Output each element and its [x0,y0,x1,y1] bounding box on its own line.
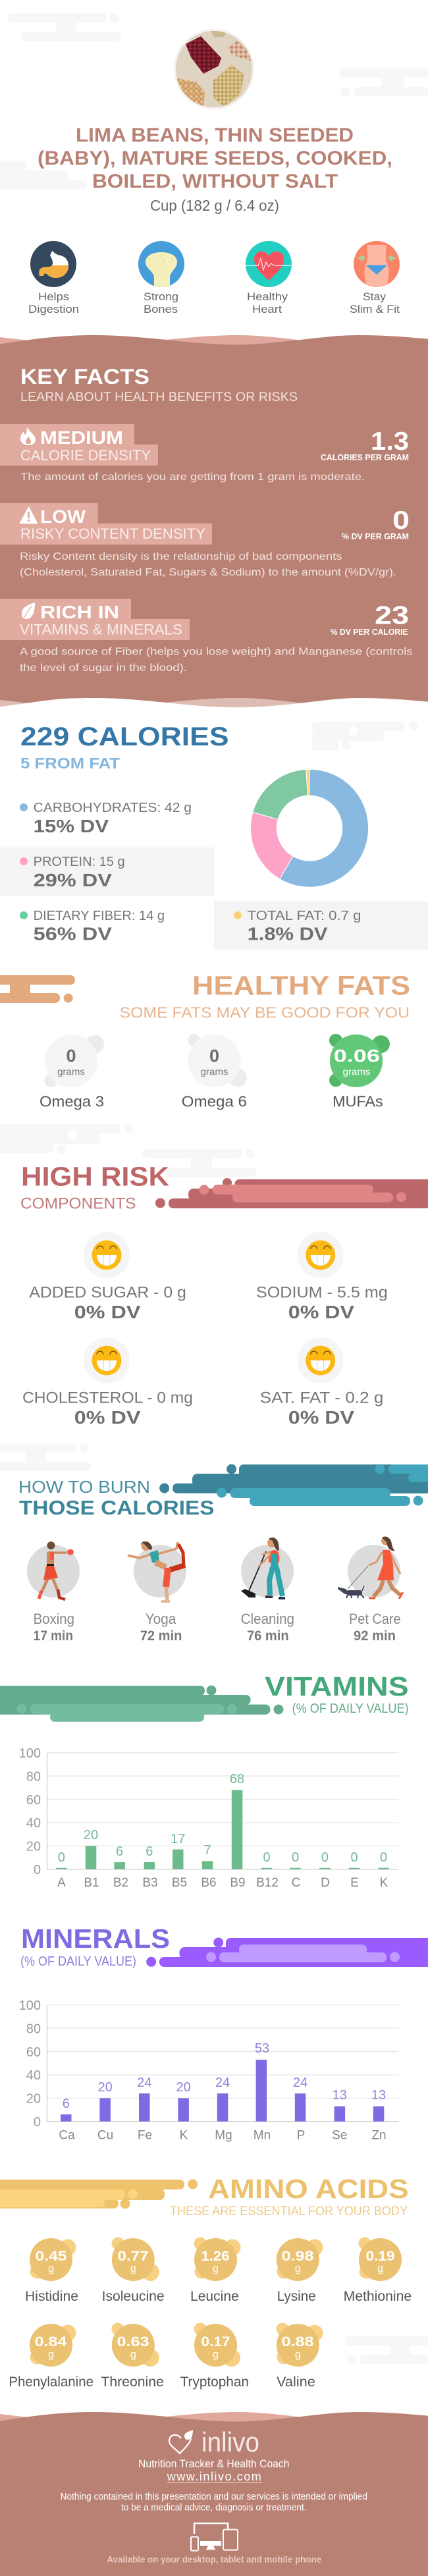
amino: lysine: Lysine [277,2289,316,2304]
bar chart: minerals: K [180,2128,188,2142]
burn heading: THOSE CALORIES [19,1496,215,1519]
footer disclaimer: to be a medical advice, diagnosis or treatment. [121,2503,307,2513]
bar chart: vitamins: 20 [26,1840,41,1854]
vitamins and minerals label: VITAMINS & MINERALS [20,622,182,637]
bar chart: vitamins: 17 [171,1832,185,1846]
risk: saturated fat: 0% DV [288,1407,354,1428]
benefit: strong bones: Strong [144,290,178,303]
title [38,124,392,192]
amino: threonine: Threonine [101,2375,164,2390]
bar chart: minerals: 13 [333,2088,347,2103]
amino: tryptophan [180,2323,249,2390]
amino: lysine: 0.98 [282,2249,314,2264]
activity: yoga [128,1542,186,1644]
activity: pet care: Pet Care [349,1611,401,1627]
amino: leucine: 1.26 [201,2249,229,2264]
risky content density value [342,506,410,541]
fat: omega 3: Omega 3 [40,1093,104,1110]
amino acids subheading: THESE ARE ESSENTIAL FOR YOUR BODY [170,2205,408,2218]
bar chart: vitamins: 68 [230,1772,244,1786]
nutrient: carbohydrates: 15% DV [34,816,109,836]
vitamins and minerals text: A good source of Fiber (helps you lose weight) and Manganese (controls [20,647,412,657]
amino: histidine: g [48,2263,54,2274]
risky content density value: % DV PER GRAM [342,532,409,541]
amino acids cloud [0,2180,198,2209]
high risk heading: HIGH RISK [21,1162,169,1192]
bar chart: vitamins: 100 [19,1746,41,1761]
amino: phenylalanine: Phenylalanine [9,2375,94,2390]
burn heading: HOW TO BURN [18,1477,150,1497]
nutrient: dietary fiber: DIETARY FIBER: 14 g [34,909,165,923]
amino acids heading: AMINO ACIDS [208,2174,409,2204]
benefit: stay slim and fit: Slim & Fit [350,303,400,315]
background cloud: behind title [0,161,87,190]
burn cloud [159,1464,428,1506]
fat: MUFAs [329,1034,390,1110]
amino: valine: Valine [277,2375,315,2390]
bar chart: vitamins: B6 [201,1876,217,1890]
bar chart: minerals: 100 [19,1999,41,2013]
high risk subheading: COMPONENTS [20,1195,136,1213]
calorie density text: The amount of calories you are getting from 1 gram is moderate. [20,471,365,483]
vitamins and minerals text: the level of sugar in the blood). [20,662,187,674]
footer logo: inlivo [201,2427,259,2457]
bar chart: vitamins: C [292,1876,300,1890]
bar chart: minerals: 80 [26,2022,41,2036]
bar chart: vitamins: 0 [34,1863,41,1877]
panel: key facts [0,335,428,707]
benefit: healthy heart: Healthy [247,290,288,303]
risky content density label: LOW [40,506,86,527]
calorie density value: CALORIES PER GRAM [321,453,409,462]
bar chart: minerals: 0 [34,2115,41,2130]
activity: pet care [338,1536,403,1644]
bar chart: minerals: 24 [293,2076,308,2090]
bar chart: vitamins: 0 [58,1850,65,1865]
bar chart: minerals: 53 [255,2041,269,2056]
footer disclaimer: Nothing contained in this presentation and our services is intended or implied [61,2492,367,2502]
bar chart: minerals: Zn [371,2128,387,2142]
vitamins and minerals label [0,599,190,640]
bar chart: vitamins [19,1746,398,1890]
bar chart: vitamins: 40 [26,1816,41,1831]
title: (BABY), MATURE SEEDS, COOKED, [38,148,392,169]
nutrient: total fat [214,901,428,950]
footer url: www.inlivo.com [167,2470,261,2483]
vitamins and minerals value: % DV PER CALORIE [331,628,408,637]
amino: leucine: g [213,2263,219,2274]
nutrient: total fat: TOTAL FAT: 0.7 g [248,909,361,923]
bar chart: vitamins: 7 [203,1843,211,1858]
bar chart: vitamins: B12 [256,1876,279,1890]
calories from fat: 5 FROM FAT [20,755,120,772]
footer logo [169,2427,259,2457]
benefit: strong bones: Bones [144,303,178,315]
bar chart: minerals: Mn [254,2128,271,2142]
background cloud: burn [0,1443,92,1471]
amino: lysine: g [295,2263,301,2274]
fat: omega 6: Omega 6 [182,1093,247,1110]
amino: leucine [190,2238,241,2304]
bar chart: minerals: 40 [26,2068,41,2083]
nutrient: carbohydrates: CARBOHYDRATES: 42 g [34,801,192,815]
bar chart: vitamins: 0 [321,1850,329,1865]
risk: cholesterol: 0% DV [74,1407,141,1428]
benefit: helps digestion: Digestion [28,303,79,315]
bar chart: minerals: 6 [63,2097,70,2111]
bar chart: vitamins: B3 [142,1876,158,1890]
fat: omega 6: 0 [209,1046,219,1066]
minerals subheading: (% OF DAILY VALUE) [20,1954,136,1969]
vitamins subheading: (% OF DAILY VALUE) [292,1702,409,1716]
bar chart: vitamins: 60 [26,1793,41,1808]
activity: boxing: 17 min [34,1628,73,1644]
nutrient: dietary fiber [20,909,165,944]
fat: omega 6 [182,1034,247,1110]
bar chart: vitamins: 20 [84,1828,98,1842]
activity: cleaning [241,1538,294,1644]
activity: boxing [27,1542,80,1644]
burn heading [18,1477,215,1519]
bar chart: minerals: 13 [371,2088,386,2103]
amino: histidine [25,2238,78,2304]
header photo: bean sacks [173,29,254,109]
calorie density label: MEDIUM [40,427,123,448]
risky content density text: Risky Content density is the relationship of bad components [20,551,342,562]
vitamins and minerals value: 23 [375,602,409,630]
amino: tryptophan: Tryptophan [180,2375,249,2390]
amino: phenylalanine [9,2324,94,2390]
bar chart: minerals: 24 [137,2076,151,2090]
footer disclaimer [61,2492,367,2513]
fat: MUFAs: MUFAs [333,1093,383,1110]
bar chart: minerals: 20 [176,2080,191,2095]
risky content density value: 0 [392,506,410,535]
healthy fats subheading: SOME FATS MAY BE GOOD FOR YOU [120,1004,410,1021]
amino: methionine: 0.19 [366,2249,395,2264]
risk: sodium: 0% DV [288,1302,354,1322]
vitamins heading: VITAMINS [265,1671,409,1702]
bar chart: minerals: Mg [215,2128,232,2142]
bar chart: minerals: 20 [97,2080,113,2095]
healthy fats cloud [0,975,75,1003]
bar chart: minerals: P [297,2128,305,2142]
amino: phenylalanine: 0.84 [34,2334,67,2349]
bar chart: vitamins: 0 [380,1850,387,1865]
bar chart: vitamins: B5 [172,1876,187,1890]
footer tagline: Nutrition Tracker & Health Coach [138,2457,290,2470]
background cloud: above high risk left [0,1124,134,1154]
footer availability: Available on your desktop, tablet and mobile phone [107,2554,321,2565]
donut chart: macronutrients [250,769,369,887]
fat: omega 6: grams [200,1067,228,1078]
background cloud: top left [7,13,121,41]
bar chart: vitamins: 6 [146,1844,153,1859]
healthy fats heading: HEALTHY FATS [192,971,410,1001]
bar chart: vitamins: 80 [26,1769,41,1784]
activity: cleaning: Cleaning [241,1611,294,1627]
benefit: stay slim and fit [350,241,400,315]
calorie density value: 1.3 [371,427,409,456]
bar chart: vitamins: B1 [84,1876,99,1890]
bar chart: vitamins: D [321,1876,330,1890]
vitamins and minerals value [331,602,409,637]
benefit: strong bones [138,241,184,315]
title: BOILED, WITHOUT SALT [92,171,338,192]
calorie density label: CALORIE DENSITY [20,447,151,464]
bar chart: minerals: 20 [26,2092,41,2106]
amino: lysine [277,2238,323,2304]
bar chart: vitamins: B9 [230,1876,246,1890]
risk: added sugar: ADDED SUGAR - 0 g [29,1284,186,1302]
bar chart: vitamins: K [380,1876,388,1890]
background cloud: calories [311,722,418,751]
amino: isoleucine: Isoleucine [102,2289,165,2304]
amino: tryptophan: g [213,2349,219,2361]
nutrient: total fat: 1.8% DV [248,924,328,944]
amino: phenylalanine: g [48,2349,54,2361]
amino: isoleucine: 0.77 [117,2249,149,2264]
title: LIMA BEANS, THIN SEEDED [76,124,354,146]
amino: isoleucine: g [130,2263,136,2274]
amino: isoleucine [102,2238,165,2304]
activity: yoga: Yoga [146,1611,176,1627]
bar chart: minerals: Cu [97,2128,113,2142]
calorie density value [321,427,409,462]
nutrient: dietary fiber: 56% DV [34,924,112,944]
bar chart: vitamins: 0 [350,1850,358,1865]
risk: saturated fat: SAT. FAT - 0.2 g [260,1389,383,1407]
risk: added sugar: 0% DV [74,1302,141,1322]
risk: sodium: SODIUM - 5.5 mg [256,1284,388,1302]
vitamins and minerals label: RICH IN [40,602,119,622]
amino: methionine [344,2238,412,2304]
activity: cleaning: 76 min [247,1628,289,1644]
amino: valine: g [295,2349,301,2361]
bar chart: vitamins: 6 [116,1844,123,1859]
serving size: Cup (182 g / 6.4 oz) [150,197,279,214]
amino: threonine: 0.63 [117,2334,149,2349]
bar chart: vitamins: B2 [113,1876,128,1890]
fat: omega 3: grams [57,1067,85,1078]
benefit: stay slim and fit: Stay [363,290,386,303]
key facts heading: KEY FACTS [20,365,149,389]
background cloud: amino right [345,2336,428,2364]
activity: boxing: Boxing [34,1611,74,1627]
calories heading: 229 CALORIES [20,722,229,751]
amino: valine: 0.88 [282,2334,314,2349]
bar chart: minerals: Se [332,2128,347,2142]
benefit: healthy heart [246,241,292,315]
nutrient: carbohydrates [20,801,192,836]
vitamins cloud [0,1686,283,1722]
bar chart: minerals: 60 [26,2045,41,2060]
nutrient: protein [0,847,215,896]
nutrient: protein: 29% DV [34,870,112,890]
bar chart: vitamins: A [57,1876,66,1890]
benefit: helps digestion: Helps [38,290,69,303]
risky content density label: RISKY CONTENT DENSITY [20,525,205,542]
key facts subheading: LEARN ABOUT HEALTH BENEFITS OR RISKS [20,390,298,404]
amino: threonine: g [130,2349,136,2361]
risky content density text [20,551,396,578]
benefit: helps digestion [28,241,79,315]
fat: omega 3 [40,1034,104,1110]
bar chart: vitamins: 0 [263,1850,271,1865]
amino: valine [277,2323,323,2390]
background cloud: top right [339,68,428,96]
amino: methionine: Methionine [344,2289,412,2304]
nutrient: protein: PROTEIN: 15 g [34,855,125,869]
amino: histidine: Histidine [25,2289,78,2304]
risk: added sugar [29,1232,186,1322]
benefit: healthy heart: Heart [252,303,282,315]
risky content density label [0,503,212,545]
bar chart: minerals: 24 [215,2076,230,2090]
amino: leucine: Leucine [190,2289,239,2304]
risk: cholesterol: CHOLESTEROL - 0 mg [22,1389,193,1407]
amino: tryptophan: 0.17 [201,2334,230,2349]
activity: yoga: 72 min [140,1628,182,1644]
bar chart: minerals: Fe [138,2128,152,2142]
activity: pet care: 92 min [354,1628,396,1644]
fat: MUFAs: grams [342,1067,370,1078]
calorie density label [0,424,158,466]
background cloud: above high risk right [142,1149,257,1177]
minerals heading: MINERALS [21,1923,170,1954]
risk: cholesterol [22,1337,193,1428]
high risk cloud [155,1178,428,1208]
fat: omega 3: 0 [66,1046,76,1066]
panel: footer [0,2412,428,2576]
bar chart: vitamins: E [350,1876,359,1890]
vitamins and minerals text [20,647,412,674]
risk: saturated fat [260,1337,383,1428]
bar chart: vitamins: 0 [292,1850,299,1865]
bar chart: minerals [19,1999,398,2142]
risky content density text: (Cholesterol, Saturated Fat, Sugars & Sodium) to the amount (%DV/gr). [20,567,396,578]
amino: threonine [101,2323,164,2390]
minerals cloud [146,1937,428,1967]
bar chart: minerals: Ca [59,2128,75,2142]
amino: histidine: 0.45 [36,2249,67,2264]
icon: devices [191,2523,238,2551]
amino: methionine: g [377,2263,383,2274]
risk: sodium [256,1232,388,1322]
fat: MUFAs: 0.06 [334,1046,380,1066]
